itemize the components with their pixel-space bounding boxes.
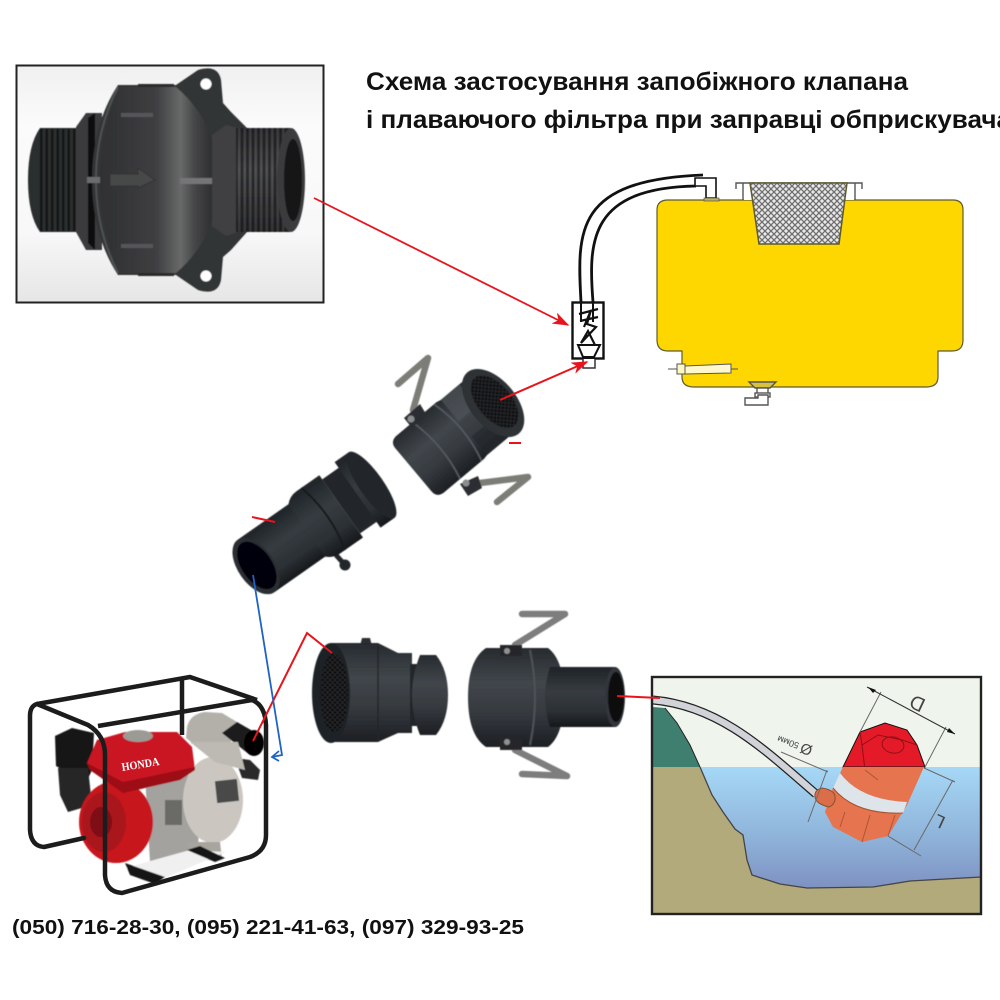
drain fitting [745,382,776,405]
arrow: coupling to safety valve [500,362,587,400]
filler neck [736,183,862,200]
arrow: blue hose to pump [253,575,282,761]
locking nub [336,555,345,565]
left thread [28,128,90,232]
frame front [30,700,266,893]
panel: floating filter diagram [652,677,981,914]
water pump photo [30,677,266,893]
grooves on body [121,115,153,246]
scene sky [652,677,981,914]
phone numbers: (050) 716-28-30, (095) 221-41-63, (097) 329-93-25 [12,917,524,939]
black engine block [55,728,94,783]
lever top [398,358,428,410]
suction hose [653,700,816,794]
mark: coupling red tick [509,442,521,444]
title [366,68,1000,134]
arrow: pump outlet to coupling [253,633,332,741]
dimension labels: Ø 50мм [775,730,815,759]
valve outlet [277,128,305,232]
pump housing [183,757,243,843]
dimension labels: L [931,810,948,832]
engine centre [145,775,200,862]
ground [653,767,981,914]
scene water [700,767,981,892]
panel: check valve photo [16,66,324,302]
arrow: valve photo to safety valve [314,198,568,325]
dimension lines [781,687,955,856]
left flange [76,113,102,250]
tank body [657,200,963,387]
dimension labels [775,690,948,832]
mark: hose red tick [252,517,275,522]
lever bottom [472,477,528,502]
lever hinges [404,404,426,428]
red fuel tank [87,732,195,793]
body silhouette with ears and collar [92,68,247,292]
tank [657,183,963,405]
lower female hose coupling [468,614,625,776]
dimension labels: D [906,690,929,716]
right collar [212,125,238,236]
recoil housing [79,781,153,863]
levers [515,614,565,645]
level sensor [668,364,738,374]
hill [653,707,700,767]
title: Схема застосування запобіжного клапана [366,68,909,96]
right thread [236,128,290,232]
upper female cam coupling [388,358,536,502]
elbow fitting [695,178,716,198]
lower male hose coupling [218,445,404,609]
filter float [815,723,925,842]
connector: coupling to filter hose [617,696,660,698]
title: і плаваючого фільтра при заправці обприскувача [366,106,1000,134]
strainer basket [750,183,847,244]
frame rear [37,677,257,735]
base [125,850,226,880]
lower male threaded coupling [312,638,448,743]
body slots [180,178,212,184]
flow arrow [110,168,155,188]
safety valve symbol [572,300,604,368]
pump elbow [186,712,237,745]
hose to tank [580,175,719,302]
honda logo: HONDA [121,756,161,774]
valve body [100,87,212,273]
